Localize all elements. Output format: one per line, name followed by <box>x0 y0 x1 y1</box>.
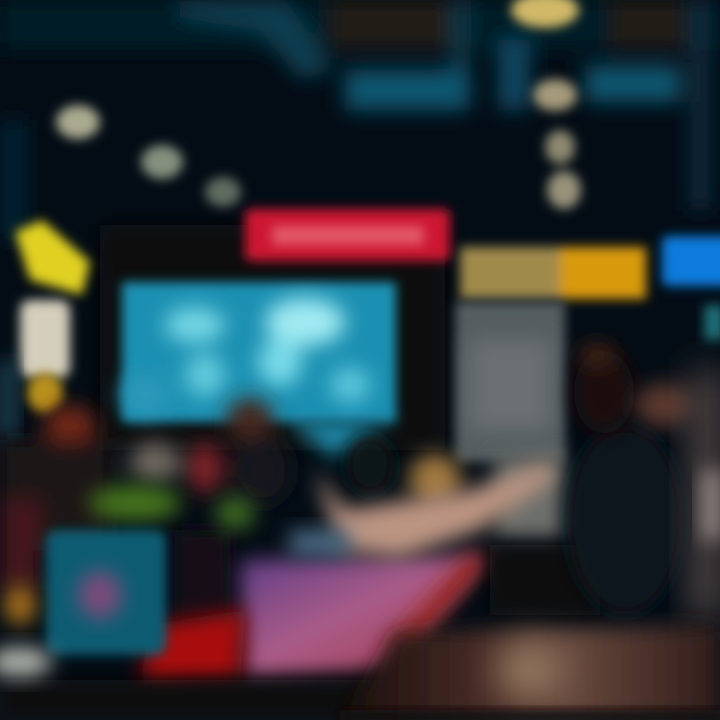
foreground brown table <box>340 625 720 720</box>
grey information board <box>455 302 565 540</box>
yellow sign <box>460 247 646 299</box>
green foliage <box>89 485 255 530</box>
monitor surround <box>100 225 445 450</box>
table surface <box>0 555 490 720</box>
ceiling lights <box>56 0 581 209</box>
crowd on left <box>0 398 394 620</box>
red sign <box>245 209 450 261</box>
foreground person <box>490 343 720 620</box>
small teal accent <box>704 305 720 340</box>
screen: world map <box>121 282 396 458</box>
seated person with outstretched arm <box>290 454 555 558</box>
blue sign <box>662 236 720 286</box>
ceiling structure <box>0 0 720 240</box>
left signage column <box>0 220 90 440</box>
tablet device <box>0 530 166 677</box>
